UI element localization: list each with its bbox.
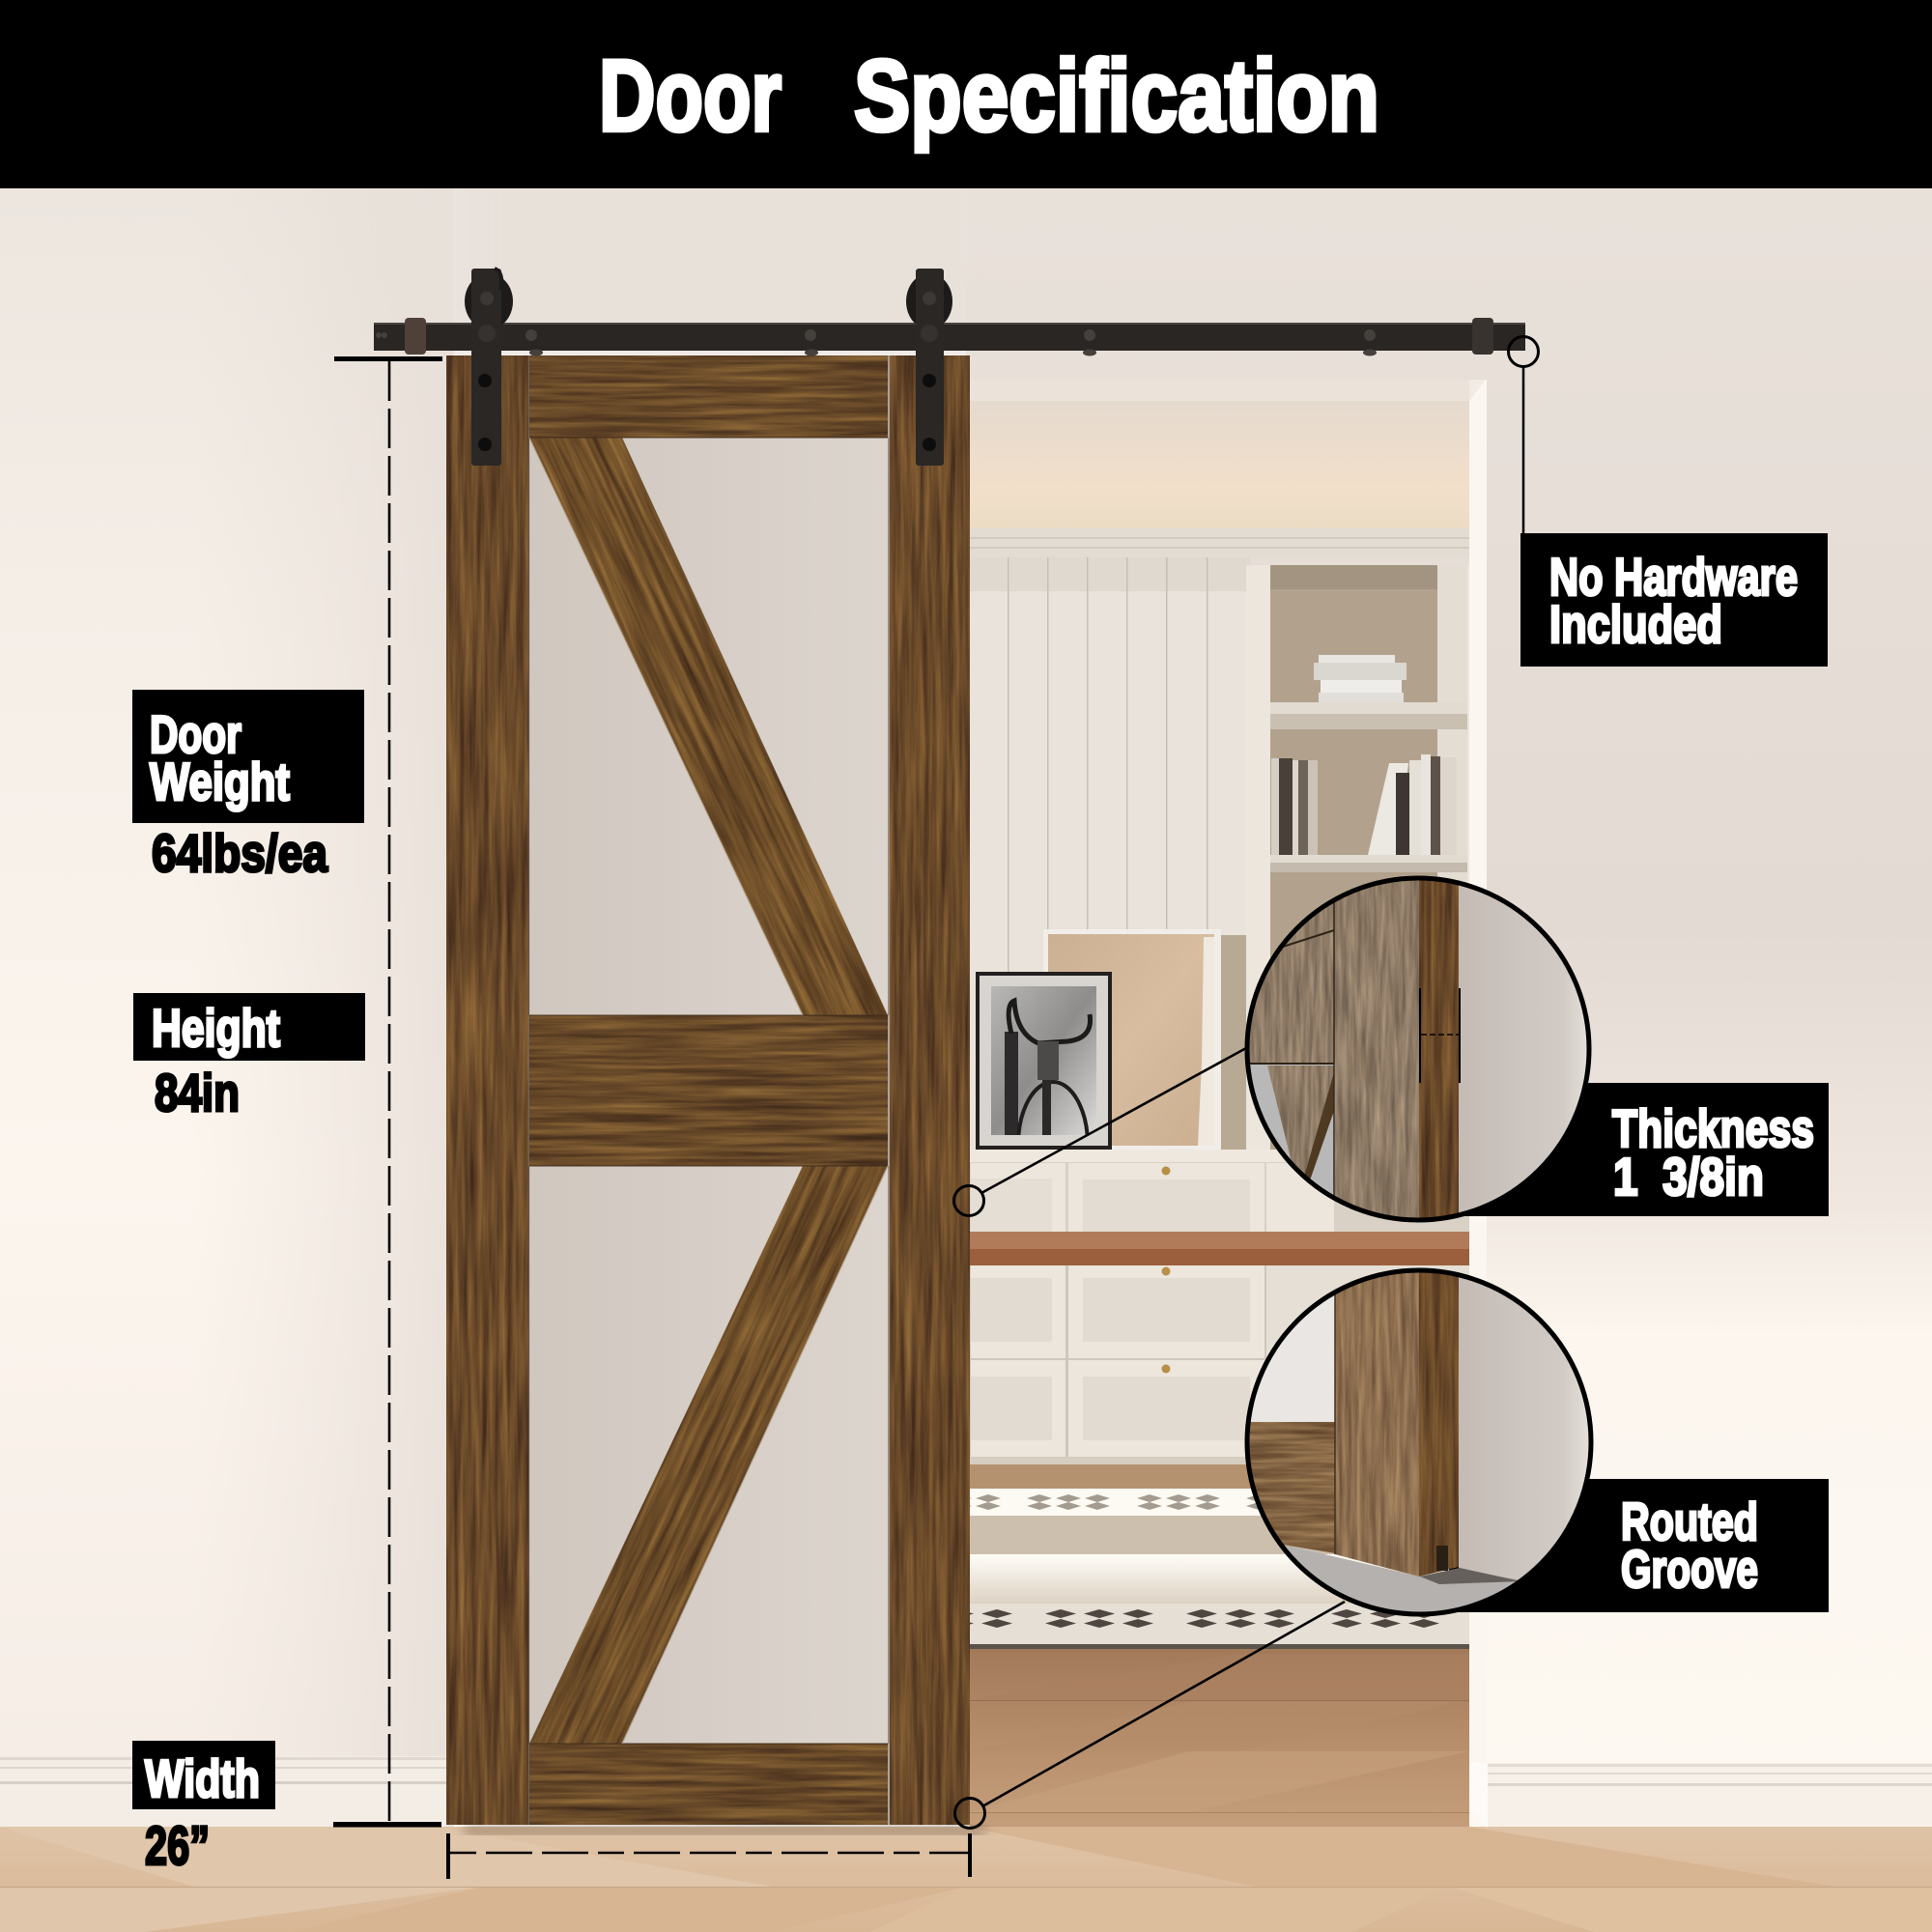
baseboard: right [1488,1763,1932,1827]
label: routed groove backing: Groove [1621,1539,1758,1599]
sliding track rail [374,318,1525,355]
inset plank faces [1250,902,1335,1064]
label: height: 84in [155,1063,240,1122]
panelled wall [970,557,1250,1156]
label: routed groove backing: Routed [1621,1492,1758,1551]
barn door [309,301,1108,1880]
inset floor [1285,1546,1519,1611]
cabinet drawers: upper [970,1162,1469,1232]
label: door weight: Door [150,704,242,764]
label: door weight: Weight [150,752,290,811]
inset bottom rail [1241,1422,1335,1553]
inset door edge [1419,869,1459,1227]
leader to routed groove inset [954,1602,1345,1828]
book stack [1314,655,1406,702]
title [599,40,1379,153]
label: door weight: 64lbs/ea [152,823,327,883]
inset: door thickness detail [1241,869,1599,1227]
crown moulding [970,528,1469,557]
right stile [890,355,970,1825]
height dimension line [333,356,442,1828]
glass/panel infill [527,438,890,1744]
label: width: Width [145,1748,260,1808]
brace highlights [529,438,888,1744]
bookcase [1246,565,1469,1154]
right end clip [1472,318,1493,355]
baseboard: left [0,1756,446,1828]
inset door edge [1419,1265,1459,1577]
routed groove [1436,1546,1448,1571]
left end clip [405,318,426,355]
label: no hardware: No Hardware [1549,547,1798,607]
header band [0,0,1932,188]
title: Door [599,40,781,153]
inset stile face [1335,1265,1419,1577]
joint lines [529,355,889,1825]
label: door weight [132,690,364,883]
framed bicycle photo [976,972,1112,1150]
far floor strip [970,1464,1469,1489]
label: no hardware: Included [1549,594,1722,654]
top rail [529,355,888,438]
inset right wall [1459,1277,1588,1580]
soffit of opening [970,380,1486,401]
ceiling glow [970,401,1469,528]
label: height [133,993,365,1122]
cabinet drawers: lower [970,1265,1469,1464]
rail bolts [376,329,1377,355]
hanger: left [465,269,513,466]
label: width: 26” [145,1815,210,1877]
upright books [1271,754,1457,855]
door casing [1469,380,1488,1828]
label: thickness backing [1449,1083,1829,1216]
inner wood floor [970,1649,1469,1827]
upper diagonal brace [309,301,1108,1151]
label: thickness backing: Thickness [1612,1098,1814,1158]
label: thickness backing: 1 3/8in [1613,1147,1764,1207]
inset: routed groove detail [1241,1265,1604,1623]
door shadow on floor [464,1826,985,1834]
inset joint lines [1250,902,1335,1196]
room seen through the doorway [904,380,1488,1828]
left stile [446,355,528,1825]
title: Specification [854,40,1379,153]
width dimension line [446,1833,972,1879]
walnut shelf [970,1232,1469,1265]
label: width [132,1741,275,1877]
bottom rail [529,1744,888,1825]
inset background wall [1459,885,1584,1213]
label: routed groove backing [1449,1479,1829,1612]
leader to thickness inset [954,1048,1246,1215]
label: no hardware [1509,336,1828,667]
label: height: Height [152,998,280,1058]
thickness measure marks [1420,988,1460,1083]
lower diagonal brace [309,1030,1108,1880]
counter top [970,1150,1469,1162]
leaning art print [1043,929,1246,1150]
middle rail [529,1015,888,1166]
floor: herringbone wood [0,1827,1932,1932]
hanger: right [906,269,952,466]
rug with sunlight bands [904,1489,1469,1649]
inset light background [1264,1296,1334,1422]
